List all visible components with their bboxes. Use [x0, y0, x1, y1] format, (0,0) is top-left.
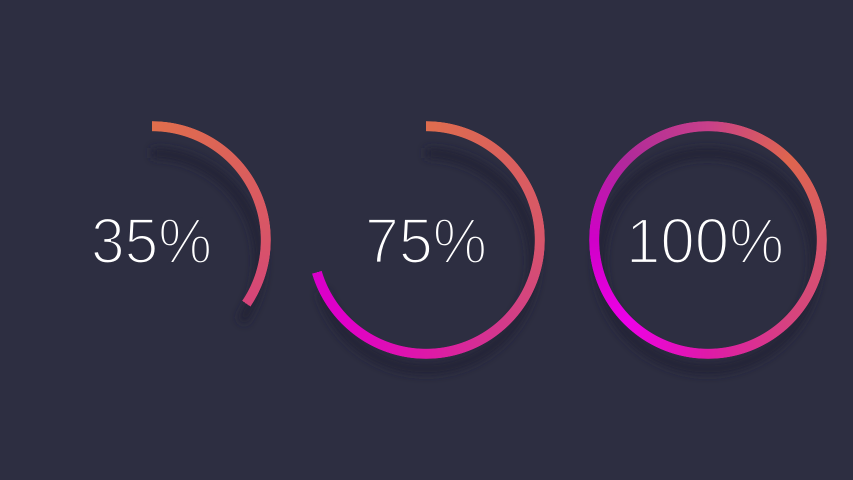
- ring: 100% progress circle: [588, 121, 826, 359]
- panel: progress rings infographic: [94, 121, 827, 373]
- ring: 35% progress arc: [152, 121, 271, 306]
- label: 100%: 100%: [626, 205, 784, 277]
- ring: 75% progress arc: [307, 121, 545, 359]
- label: 75%: 75%: [365, 205, 487, 277]
- label: 35%: 35%: [91, 205, 212, 277]
